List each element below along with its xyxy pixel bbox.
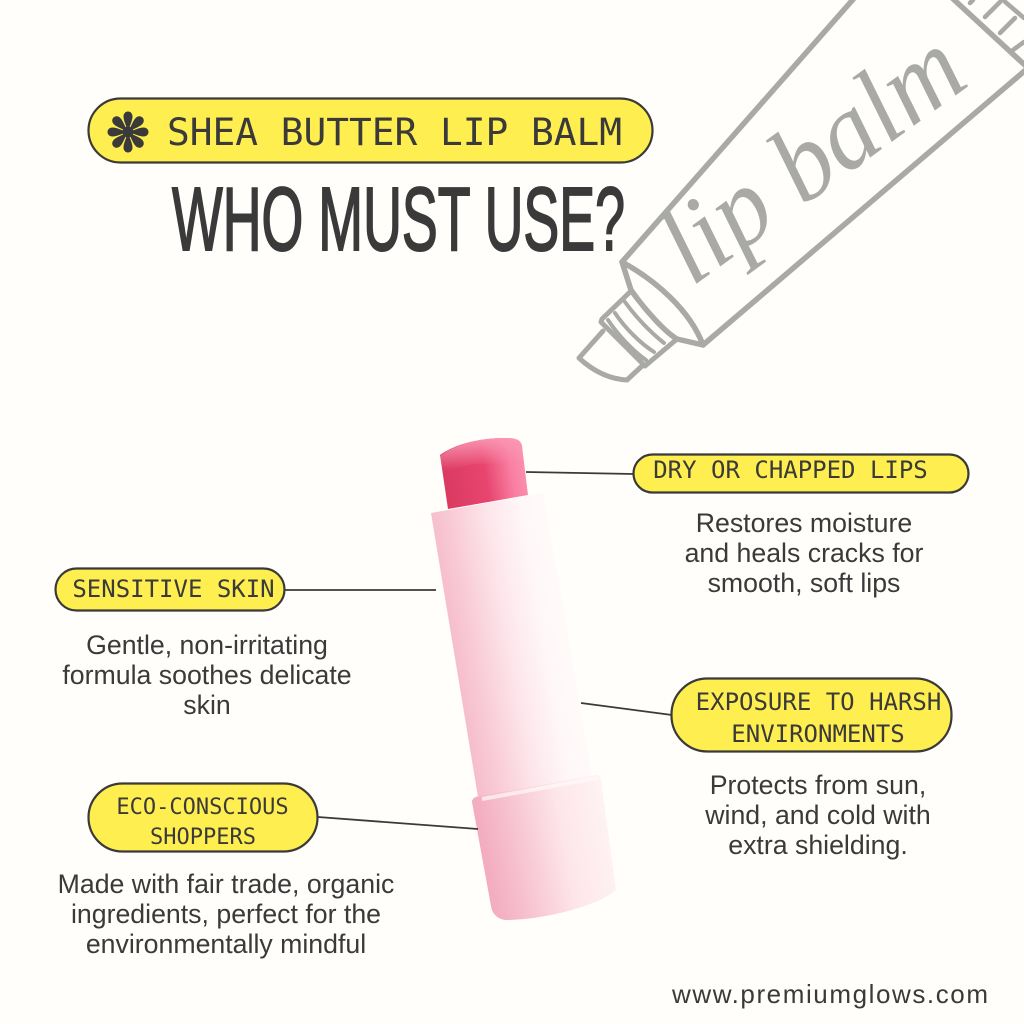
callout: dry or chapped lips: DRY OR CHAPPED LIPS xyxy=(653,456,928,484)
description: extra shielding. xyxy=(728,830,908,860)
callout: sensitive skin xyxy=(56,568,352,720)
description: skin xyxy=(183,690,231,720)
description: Restores moisture xyxy=(696,508,912,538)
leader: harsh environments xyxy=(581,703,672,715)
tube lettering: lip balm xyxy=(636,7,986,306)
leader: eco-conscious shoppers xyxy=(318,817,478,829)
description: wind, and cold with xyxy=(704,800,931,830)
description: Gentle, non-irritating xyxy=(86,630,328,660)
callout: eco-conscious shoppers: SHOPPERS xyxy=(150,825,256,850)
balm base cap xyxy=(472,775,616,920)
leader: sensitive skin xyxy=(285,589,436,591)
description: smooth, soft lips xyxy=(708,568,900,598)
callout: eco-conscious shoppers: ECO-CONSCIOUS xyxy=(116,795,289,820)
website footer: www.premiumglows.com xyxy=(671,979,988,1009)
icon: flower xyxy=(108,112,148,152)
illustration: lip balm tube xyxy=(579,0,1024,380)
callout: exposure to harsh environments: EXPOSURE TO HARSH xyxy=(696,688,941,716)
callout: sensitive skin: SENSITIVE SKIN xyxy=(72,575,275,603)
description: environmentally mindful xyxy=(86,929,366,959)
balm bullet xyxy=(440,438,528,509)
description: ingredients, perfect for the xyxy=(71,899,381,929)
description: Protects from sun, xyxy=(710,770,926,800)
callout: exposure to harsh environments: ENVIRONMENTS xyxy=(731,720,905,748)
pill text: SHEA BUTTER LIP BALM xyxy=(167,110,622,154)
description: formula soothes delicate xyxy=(62,660,352,690)
description: and heals cracks for xyxy=(685,538,924,568)
heading pill: shea butter lip balm xyxy=(88,98,652,162)
callout: eco-conscious shoppers xyxy=(58,784,394,959)
balm tube body xyxy=(431,493,592,797)
description: Made with fair trade, organic xyxy=(58,869,394,899)
leader: dry or chapped lips xyxy=(526,472,634,474)
callout: dry or chapped lips xyxy=(634,454,968,598)
product: lip balm stick xyxy=(431,438,616,920)
title: WHO MUST USE? xyxy=(172,170,625,270)
cap rim highlight xyxy=(482,778,597,799)
balm top highlight xyxy=(440,438,525,474)
callout: exposure to harsh environments xyxy=(672,678,952,860)
